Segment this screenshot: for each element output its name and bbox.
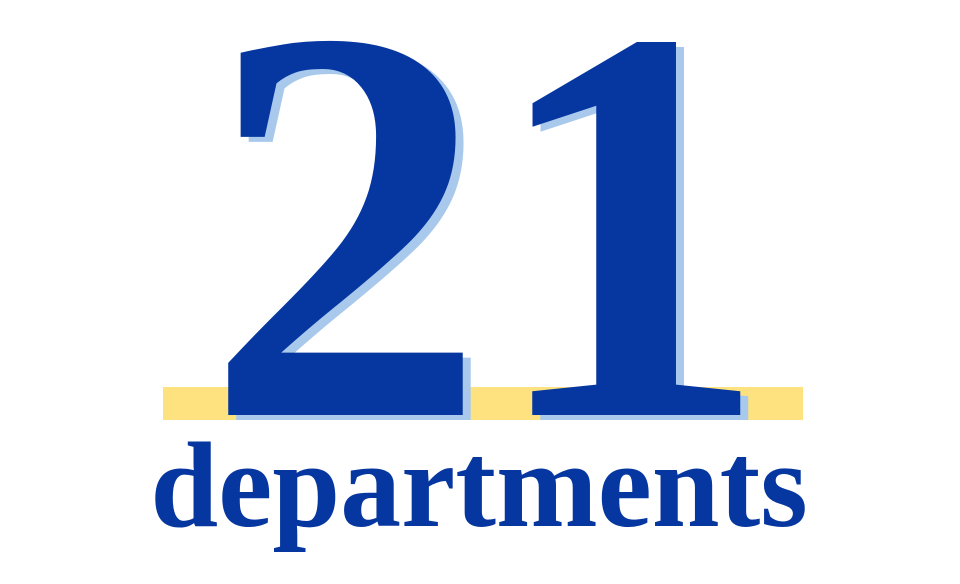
- highlight bar: [163, 387, 803, 420]
- label: departments: departments: [150, 418, 808, 553]
